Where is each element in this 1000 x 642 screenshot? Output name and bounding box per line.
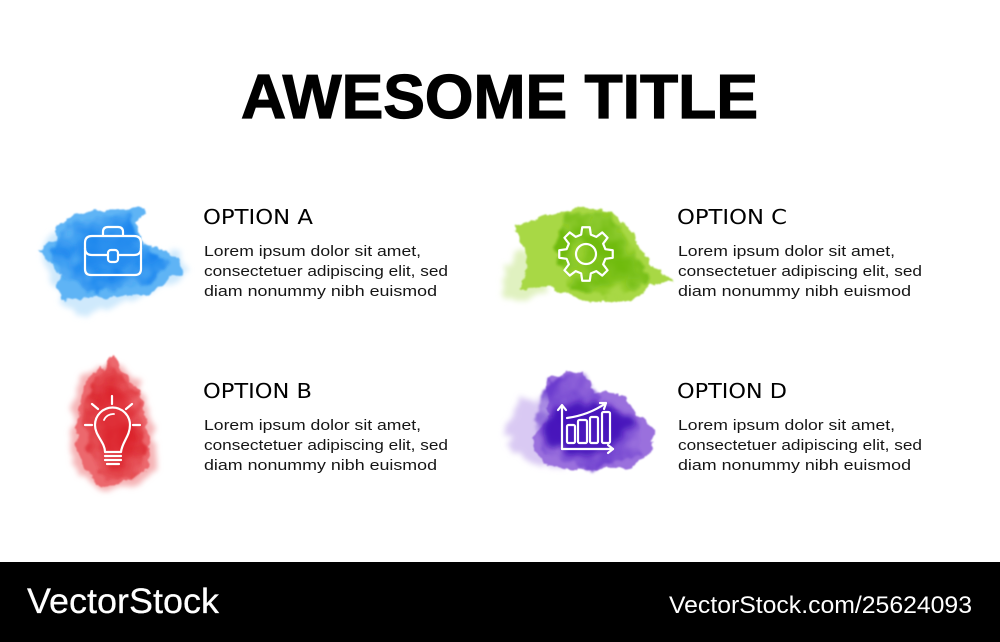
panel: option D	[506, 370, 922, 474]
panel: option B	[70, 354, 448, 492]
heading: option B: OPTION B	[203, 379, 312, 403]
text block: option B	[204, 418, 448, 474]
text block: option B: diam nonummy nibh euismod	[204, 458, 437, 474]
text block: option B: Lorem ipsum dolor sit amet,	[204, 418, 421, 434]
watercolor blob: green	[503, 207, 673, 302]
icon: briefcase	[85, 227, 141, 275]
footer logo text: VectorStock	[27, 582, 220, 621]
text block: option A: Lorem ipsum dolor sit amet,	[204, 244, 421, 260]
text block: option D: consectetuer adipiscing elit, sed	[678, 438, 922, 454]
text block: option B: consectetuer adipiscing elit, sed	[204, 438, 448, 454]
text block: option D	[678, 418, 922, 474]
text block: option A: consectetuer adipiscing elit, sed	[204, 264, 448, 280]
heading: option D: OPTION D	[677, 379, 787, 403]
footer bar	[0, 562, 1000, 642]
watercolor blob: purple	[506, 370, 656, 472]
heading: option C: OPTION C	[677, 205, 787, 229]
heading: option A: OPTION A	[203, 205, 313, 229]
icon: light bulb	[85, 396, 140, 464]
text block: option A: diam nonummy nibh euismod	[204, 284, 437, 300]
title: AWESOME TITLE	[241, 63, 758, 132]
panel: option A	[38, 205, 448, 318]
watercolor blob: blue	[38, 207, 188, 318]
panel: option C	[503, 205, 922, 302]
text block: option D: diam nonummy nibh euismod	[678, 458, 911, 474]
icon: gear	[559, 227, 613, 281]
text block: option C: consectetuer adipiscing elit, sed	[678, 264, 922, 280]
text block: option C: Lorem ipsum dolor sit amet,	[678, 244, 895, 260]
text block: option C: diam nonummy nibh euismod	[678, 284, 911, 300]
text block: option D: Lorem ipsum dolor sit amet,	[678, 418, 895, 434]
text block: option A	[204, 244, 448, 300]
icon: bar chart with arrow	[558, 403, 613, 453]
footer url: VectorStock.com/25624093	[669, 592, 972, 619]
watercolor blob: red	[70, 354, 157, 492]
text block: option C	[678, 244, 922, 300]
